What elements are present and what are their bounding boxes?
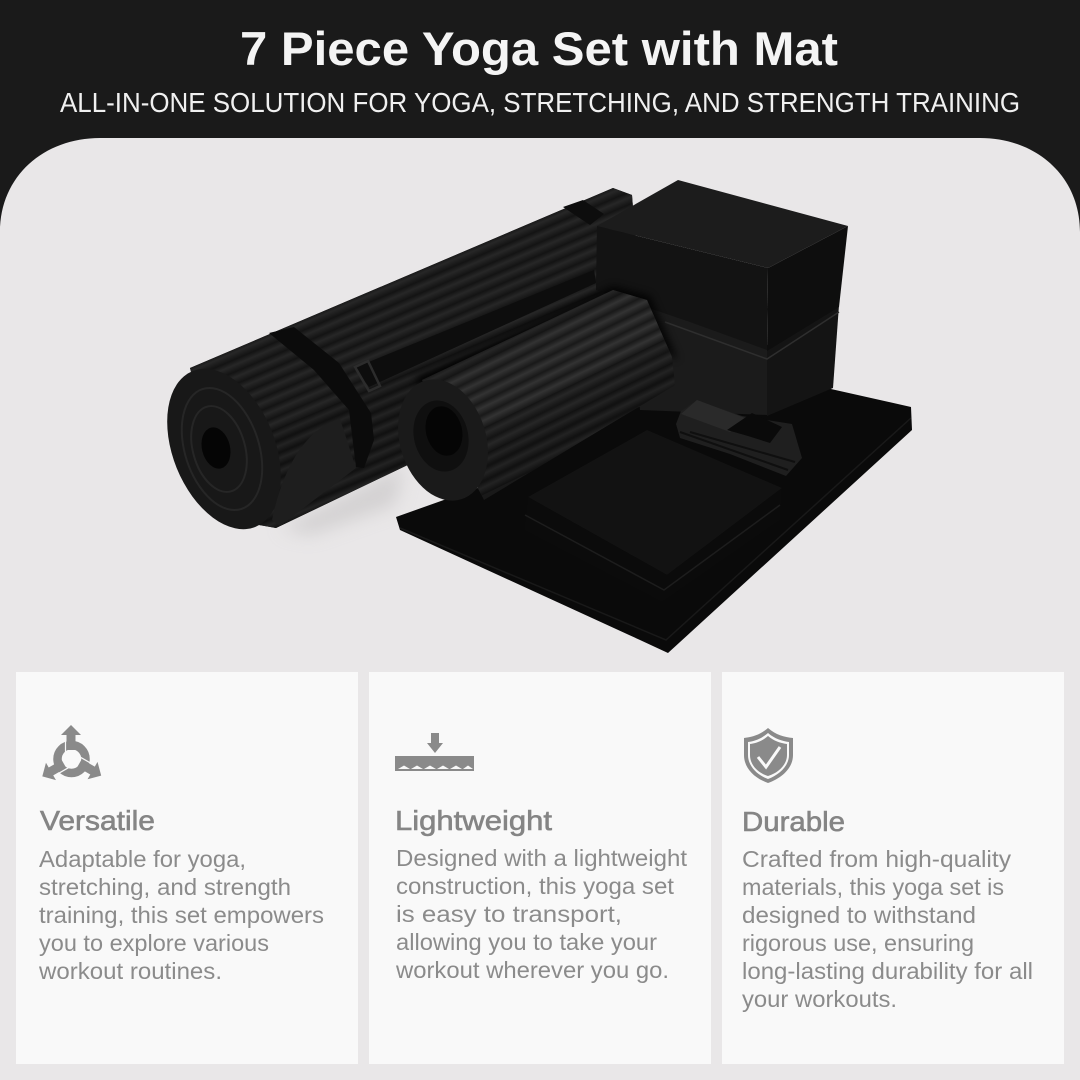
body text: lightweight: is easy to transport, <box>396 901 622 927</box>
icon: weight on foam <box>395 733 474 771</box>
body text: versatile: you to explore various <box>39 930 269 956</box>
body text: durable: Crafted from high-quality <box>742 846 1011 872</box>
lower foam block <box>630 295 839 416</box>
mat carrying strap <box>354 270 596 387</box>
body text: lightweight: construction, this yoga set <box>396 873 674 899</box>
body text: durable: designed to withstand <box>742 902 976 928</box>
heading: durable: Durable <box>742 806 845 837</box>
panel: versatile <box>16 672 358 1064</box>
body text: durable: long-lasting durability for all <box>742 958 1033 984</box>
body text: durable: materials, this yoga set is <box>742 874 1004 900</box>
body text: durable: your workouts. <box>742 986 897 1012</box>
icon: shield with check <box>744 728 793 783</box>
body text: lightweight <box>395 845 687 983</box>
soft floor shadow <box>280 465 405 535</box>
heading: lightweight: Lightweight <box>395 805 552 836</box>
upper foam block <box>596 180 848 351</box>
roll contact shadow <box>415 286 678 400</box>
body text: lightweight: workout wherever you go. <box>395 957 669 983</box>
yoga mat roll <box>167 188 635 530</box>
title: 7 Piece Yoga Set with Mat <box>240 22 838 75</box>
header band <box>0 0 1080 232</box>
icon: three arrows <box>37 725 106 785</box>
body text: versatile: Adaptable for yoga, <box>39 846 246 872</box>
body text: durable: rigorous use, ensuring <box>742 930 974 956</box>
strap buckle <box>355 361 380 391</box>
body text: versatile: training, this set empowers <box>39 902 324 928</box>
large towel <box>396 385 912 653</box>
heading: versatile: Versatile <box>40 805 155 836</box>
panel: lightweight <box>369 672 711 1064</box>
small towel <box>524 430 782 602</box>
body text: versatile: workout routines. <box>38 958 222 984</box>
small foam roll <box>398 288 676 500</box>
body text: versatile <box>38 846 324 984</box>
folded yoga strap <box>676 400 802 476</box>
body text: versatile: stretching, and strength <box>39 874 291 900</box>
panel: durable <box>722 672 1064 1064</box>
body text: durable <box>742 846 1033 1012</box>
subtitle: ALL-IN-ONE SOLUTION FOR YOGA, STRETCHING, AND STRENGTH TRAINING <box>60 87 1020 118</box>
body text: lightweight: allowing you to take your <box>396 929 657 955</box>
body text: lightweight: Designed with a lightweight <box>396 845 687 871</box>
product photo: yoga set <box>167 180 912 653</box>
